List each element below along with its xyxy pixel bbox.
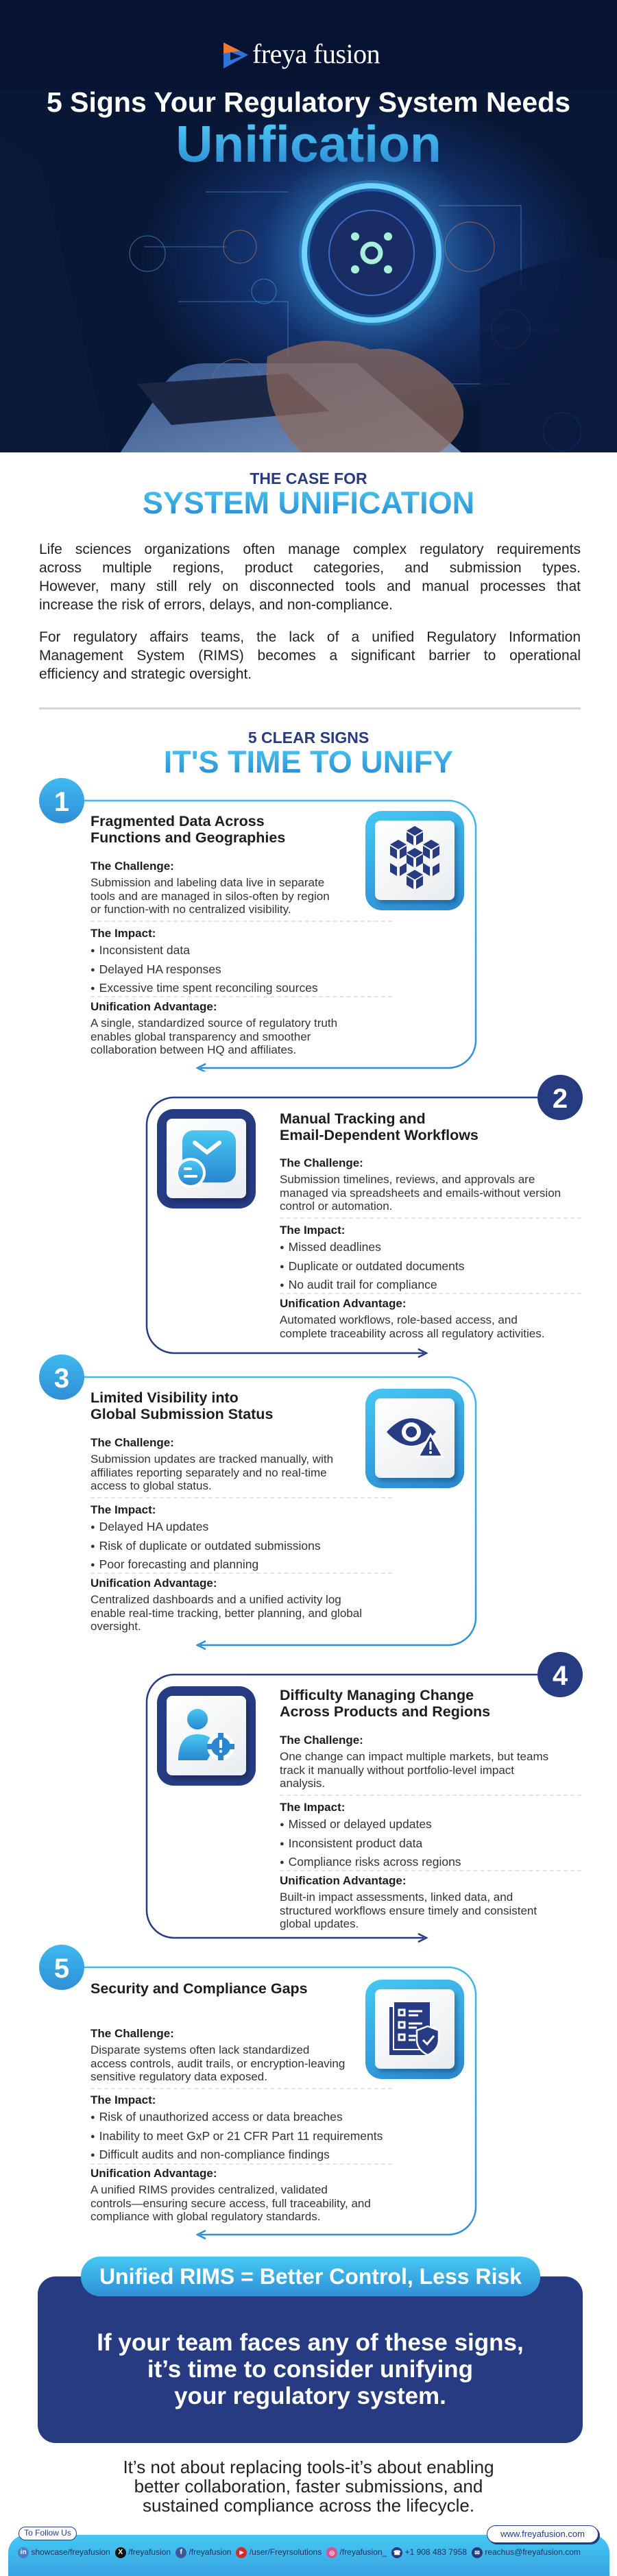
card 1: Inconsistent data xyxy=(99,943,190,957)
intro paragraphs: efficiency and strategic oversight. xyxy=(39,666,252,682)
footer xyxy=(8,2535,609,2576)
card 1: or function-with no centralized visibility. xyxy=(90,903,291,916)
intro paragraphs: Life sciences organizations often manage complex regulatory requirements xyxy=(39,542,581,557)
card 1: collaboration between HQ and affiliates. xyxy=(90,1043,296,1056)
frame with arrow: 5 xyxy=(54,1954,69,1984)
card 1: Submission and labeling data live in separate xyxy=(90,876,324,889)
card 1: A single, standardized source of regulatory truth xyxy=(90,1017,337,1030)
callout text: it’s time to consider unifying xyxy=(147,2356,473,2383)
frame with arrow xyxy=(39,778,477,1071)
banner: unified rims xyxy=(81,2257,540,2296)
social links: in xyxy=(21,2549,26,2556)
social links: reachus@freyafusion.com xyxy=(485,2547,581,2557)
social links xyxy=(18,2547,581,2558)
social links: ✉ xyxy=(474,2549,480,2556)
pill: to follow us: To Follow Us xyxy=(24,2528,71,2538)
logo: freya fusion xyxy=(252,38,380,69)
card 2: Unification Advantage: xyxy=(280,1297,406,1310)
card 2 xyxy=(145,1075,583,1359)
card 3: Submission updates are tracked manually, with xyxy=(90,1453,333,1466)
card 2: complete traceability across all regulatory activities. xyxy=(280,1327,544,1339)
heading: the case for system unification xyxy=(143,470,474,520)
frame with arrow xyxy=(145,1075,583,1359)
icon: eye warning xyxy=(365,1389,464,1488)
callout text xyxy=(97,2329,524,2409)
card 4: Difficulty Managing Change xyxy=(280,1687,474,1703)
card 4: Compliance risks across regions xyxy=(289,1855,461,1869)
social links: X xyxy=(118,2549,123,2556)
card 3: access to global status. xyxy=(90,1479,212,1492)
intro paragraphs: increase the risk of errors, delays, and non-compliance. xyxy=(39,597,393,613)
card 1 xyxy=(39,778,477,1071)
card 4: structured workflows ensure timely and consistent xyxy=(280,1904,537,1917)
heading: 5 clear signs: 5 CLEAR SIGNS xyxy=(248,729,369,746)
intro paragraphs: For regulatory affairs teams, the lack of a unified Regulatory Information xyxy=(39,629,581,645)
title: Unification xyxy=(176,115,441,173)
card 3: enable real-time tracking, better planning, and global xyxy=(90,1607,362,1619)
frame with arrow: 4 xyxy=(553,1661,568,1691)
card 5: The Impact: xyxy=(90,2093,156,2106)
card 5: sensitive regulatory data exposed. xyxy=(90,2070,267,2083)
card 1: Unification Advantage: xyxy=(90,1000,217,1013)
card 5: Security and Compliance Gaps xyxy=(90,1980,308,1997)
card 1: tools and are managed in silos-often by region xyxy=(90,890,330,902)
card 4 xyxy=(145,1652,583,1943)
social links: ☎ xyxy=(394,2549,401,2556)
card 5: The Challenge: xyxy=(90,2027,174,2040)
icon: email chat xyxy=(157,1109,256,1208)
card 5 xyxy=(39,1945,477,2240)
social links: f xyxy=(180,2549,182,2556)
card 2: Submission timelines, reviews, and approvals are xyxy=(280,1173,535,1186)
closing statement: It’s not about replacing tools-it’s about enabling xyxy=(123,2457,494,2477)
frame with arrow xyxy=(145,1652,583,1943)
card 3: Unification Advantage: xyxy=(90,1577,217,1590)
card 2: No audit trail for compliance xyxy=(289,1278,437,1291)
title xyxy=(47,86,570,173)
card 2: managed via spreadsheets and emails-without version xyxy=(280,1186,561,1200)
card 2: Duplicate or outdated documents xyxy=(289,1259,464,1272)
card 1: Excessive time spent reconciling sources xyxy=(99,981,318,995)
closing statement: sustained compliance across the lifecycle. xyxy=(143,2495,474,2516)
card 3 xyxy=(39,1354,477,1651)
heading: the case for system unification: THE CASE FOR xyxy=(250,470,367,487)
card 4: global updates. xyxy=(280,1917,359,1930)
pill: to follow us xyxy=(19,2527,77,2540)
social links: /freyafusion xyxy=(128,2547,171,2557)
card 3: The Impact: xyxy=(90,1503,156,1516)
card 3: Poor forecasting and planning xyxy=(99,1557,258,1571)
banner: unified rims: Unified RIMS = Better Control, Less Risk xyxy=(99,2264,522,2289)
card 5: controls—ensuring secure access, full traceability, and xyxy=(90,2196,371,2210)
card 3: Global Submission Status xyxy=(90,1406,273,1422)
icon: user gear xyxy=(157,1686,256,1786)
card 1: Delayed HA responses xyxy=(99,962,221,976)
title: 5 Signs Your Regulatory System Needs xyxy=(47,86,570,118)
frame with arrow: 2 xyxy=(553,1084,568,1114)
icon: document shield xyxy=(365,1980,464,2079)
social links: +1 908 483 7958 xyxy=(405,2547,467,2557)
card 4: Inconsistent product data xyxy=(289,1836,422,1849)
card 3: Centralized dashboards and a unified activity log xyxy=(90,1593,341,1606)
card 5: Risk of unauthorized access or data breaches xyxy=(99,2110,343,2124)
card 2: Missed deadlines xyxy=(289,1240,381,1254)
hero banner xyxy=(0,0,617,452)
card 4: One change can impact multiple markets, but teams xyxy=(280,1750,548,1763)
card 4: Missed or delayed updates xyxy=(289,1817,432,1831)
frame with arrow: 3 xyxy=(54,1363,69,1394)
card 2: The Impact: xyxy=(280,1224,345,1237)
social links: ◎ xyxy=(329,2549,335,2556)
card 4: Built-in impact assessments, linked data, and xyxy=(280,1891,513,1904)
card 4: track it manually without portfolio-level impact xyxy=(280,1763,514,1777)
intro paragraphs: However, many still rely on disconnected tools and manual processes that xyxy=(39,579,581,594)
card 4: Unification Advantage: xyxy=(280,1874,406,1887)
card 2: Automated workflows, role-based access, and xyxy=(280,1313,518,1326)
social links: ▶ xyxy=(239,2549,244,2555)
card 1: The Challenge: xyxy=(90,860,174,873)
conclusion box xyxy=(38,2257,583,2443)
closing statement: better collaboration, faster submissions, and xyxy=(134,2476,483,2496)
closing statement xyxy=(123,2457,494,2516)
card 3: Limited Visibility into xyxy=(90,1389,239,1406)
card 3: The Challenge: xyxy=(90,1436,174,1449)
pill: website xyxy=(487,2525,598,2543)
frame with arrow: 1 xyxy=(54,787,69,817)
social links: showcase/freyafusion xyxy=(31,2547,110,2557)
card 4: The Challenge: xyxy=(280,1734,363,1747)
card 3: affiliates reporting separately and no real-time xyxy=(90,1466,327,1479)
frame with arrow xyxy=(39,1354,477,1651)
intro paragraphs: Management System (RIMS) becomes a significant barrier to operational xyxy=(39,648,581,664)
heading: 5 clear signs: IT'S TIME TO UNIFY xyxy=(164,744,453,779)
card 5: access controls, audit trails, or encryption-leaving xyxy=(90,2056,345,2070)
card 2: Manual Tracking and xyxy=(280,1110,426,1127)
card 4: analysis. xyxy=(280,1777,325,1790)
intro paragraphs xyxy=(39,542,581,682)
heading: the case for system unification: SYSTEM UNIFICATION xyxy=(143,485,474,520)
card 1: The Impact: xyxy=(90,927,156,940)
card 5: Disparate systems often lack standardized xyxy=(90,2043,309,2056)
card 1: enables global transparency and smoother xyxy=(90,1030,311,1043)
card 5: Inability to meet GxP or 21 CFR Part 11 requirements xyxy=(99,2129,383,2143)
card 3: oversight. xyxy=(90,1620,141,1633)
social links: /freyafusion xyxy=(189,2547,231,2557)
pill: website: www.freyafusion.com xyxy=(500,2529,585,2539)
social links: /freyafusion_ xyxy=(340,2547,387,2557)
card 4: Across Products and Regions xyxy=(280,1703,490,1720)
card 2: control or automation. xyxy=(280,1200,392,1213)
card 4: The Impact: xyxy=(280,1801,345,1814)
social links: /user/Freyrsolutions xyxy=(250,2547,322,2557)
card 2: The Challenge: xyxy=(280,1156,363,1169)
card 5: compliance with global regulatory standards. xyxy=(90,2210,320,2223)
callout text: If your team faces any of these signs, xyxy=(97,2329,524,2356)
card 1: Functions and Geographies xyxy=(90,829,285,846)
card 5: Unification Advantage: xyxy=(90,2167,217,2180)
icon: data cubes xyxy=(365,811,464,910)
card 3: Delayed HA updates xyxy=(99,1520,208,1533)
heading: 5 clear signs xyxy=(164,729,453,779)
frame with arrow xyxy=(39,1945,477,2240)
card 1: Fragmented Data Across xyxy=(90,813,265,829)
card 3: Risk of duplicate or outdated submissions xyxy=(99,1538,321,1552)
card 5: Difficult audits and non-compliance findings xyxy=(99,2148,330,2161)
callout text: your regulatory system. xyxy=(174,2383,446,2409)
intro paragraphs: across multiple regions, product categories, and submission types. xyxy=(39,560,581,576)
card 5: A unified RIMS provides centralized, validated xyxy=(90,2183,328,2196)
card 2: Email-Dependent Workflows xyxy=(280,1127,479,1143)
